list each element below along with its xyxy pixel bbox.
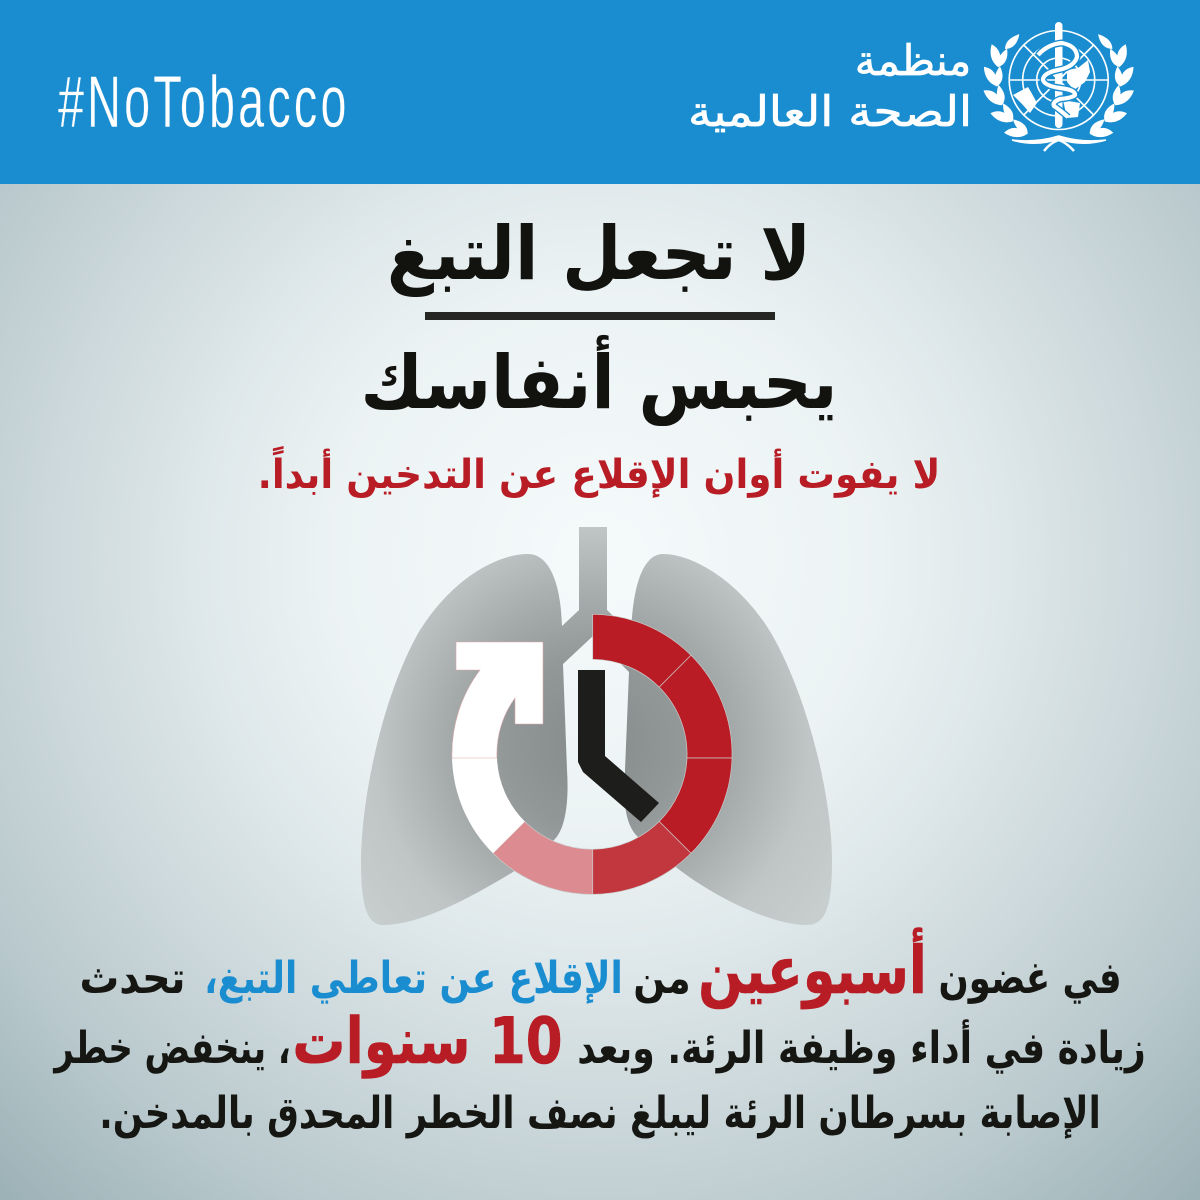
line 1: أسبوعين — [698, 928, 927, 1010]
segment 1 — [593, 614, 691, 687]
line 2: 10 سنوات — [292, 1003, 563, 1079]
line 2 — [53, 1003, 1146, 1079]
arrow — [452, 642, 543, 758]
title line 1: لا تجعل التبغ — [387, 210, 811, 297]
body text — [53, 928, 1146, 1139]
subtitle: لا يفوت أوان الإقلاع عن التدخين أبداً. — [258, 446, 940, 498]
continents — [1013, 60, 1090, 118]
line 1: تحدث — [79, 952, 186, 1004]
segment 3 — [659, 758, 732, 853]
segment 6 — [452, 758, 525, 853]
line 1: في غضون — [938, 953, 1122, 1004]
lungs and trachea — [361, 527, 832, 925]
title line 2: يحبس أنفاسك — [360, 334, 838, 426]
line 1 — [79, 928, 1122, 1010]
line 2: زيادة في أداء وظيفة الرئة. وبعد — [577, 1019, 1146, 1074]
segment 2 — [659, 655, 732, 758]
line 2: ، ينخفض خطر — [53, 1024, 291, 1074]
illustration: lungs and clock — [361, 527, 832, 925]
header band — [0, 0, 1200, 184]
organisation name: الصحة العالمية — [688, 87, 972, 136]
staff and serpent — [1055, 22, 1062, 128]
segment 4 — [593, 822, 691, 894]
title rule — [425, 312, 775, 320]
organisation name: منظمة — [855, 36, 971, 85]
segment 5 — [493, 822, 593, 894]
line 3: الإصابة بسرطان الرئة ليبلغ نصف الخطر المحدق بالمدخن. — [99, 1088, 1101, 1139]
organisation name — [688, 36, 972, 136]
laurel wreath — [983, 31, 1134, 151]
clock hand — [578, 670, 659, 822]
icon: WHO emblem — [983, 22, 1134, 151]
line 1: من — [633, 952, 691, 1004]
globe — [1009, 30, 1108, 130]
hashtag: #NoTobacco — [58, 61, 350, 142]
progress ring — [452, 614, 732, 894]
line 1: الإقلاع عن تعاطي التبغ، — [204, 954, 623, 1004]
